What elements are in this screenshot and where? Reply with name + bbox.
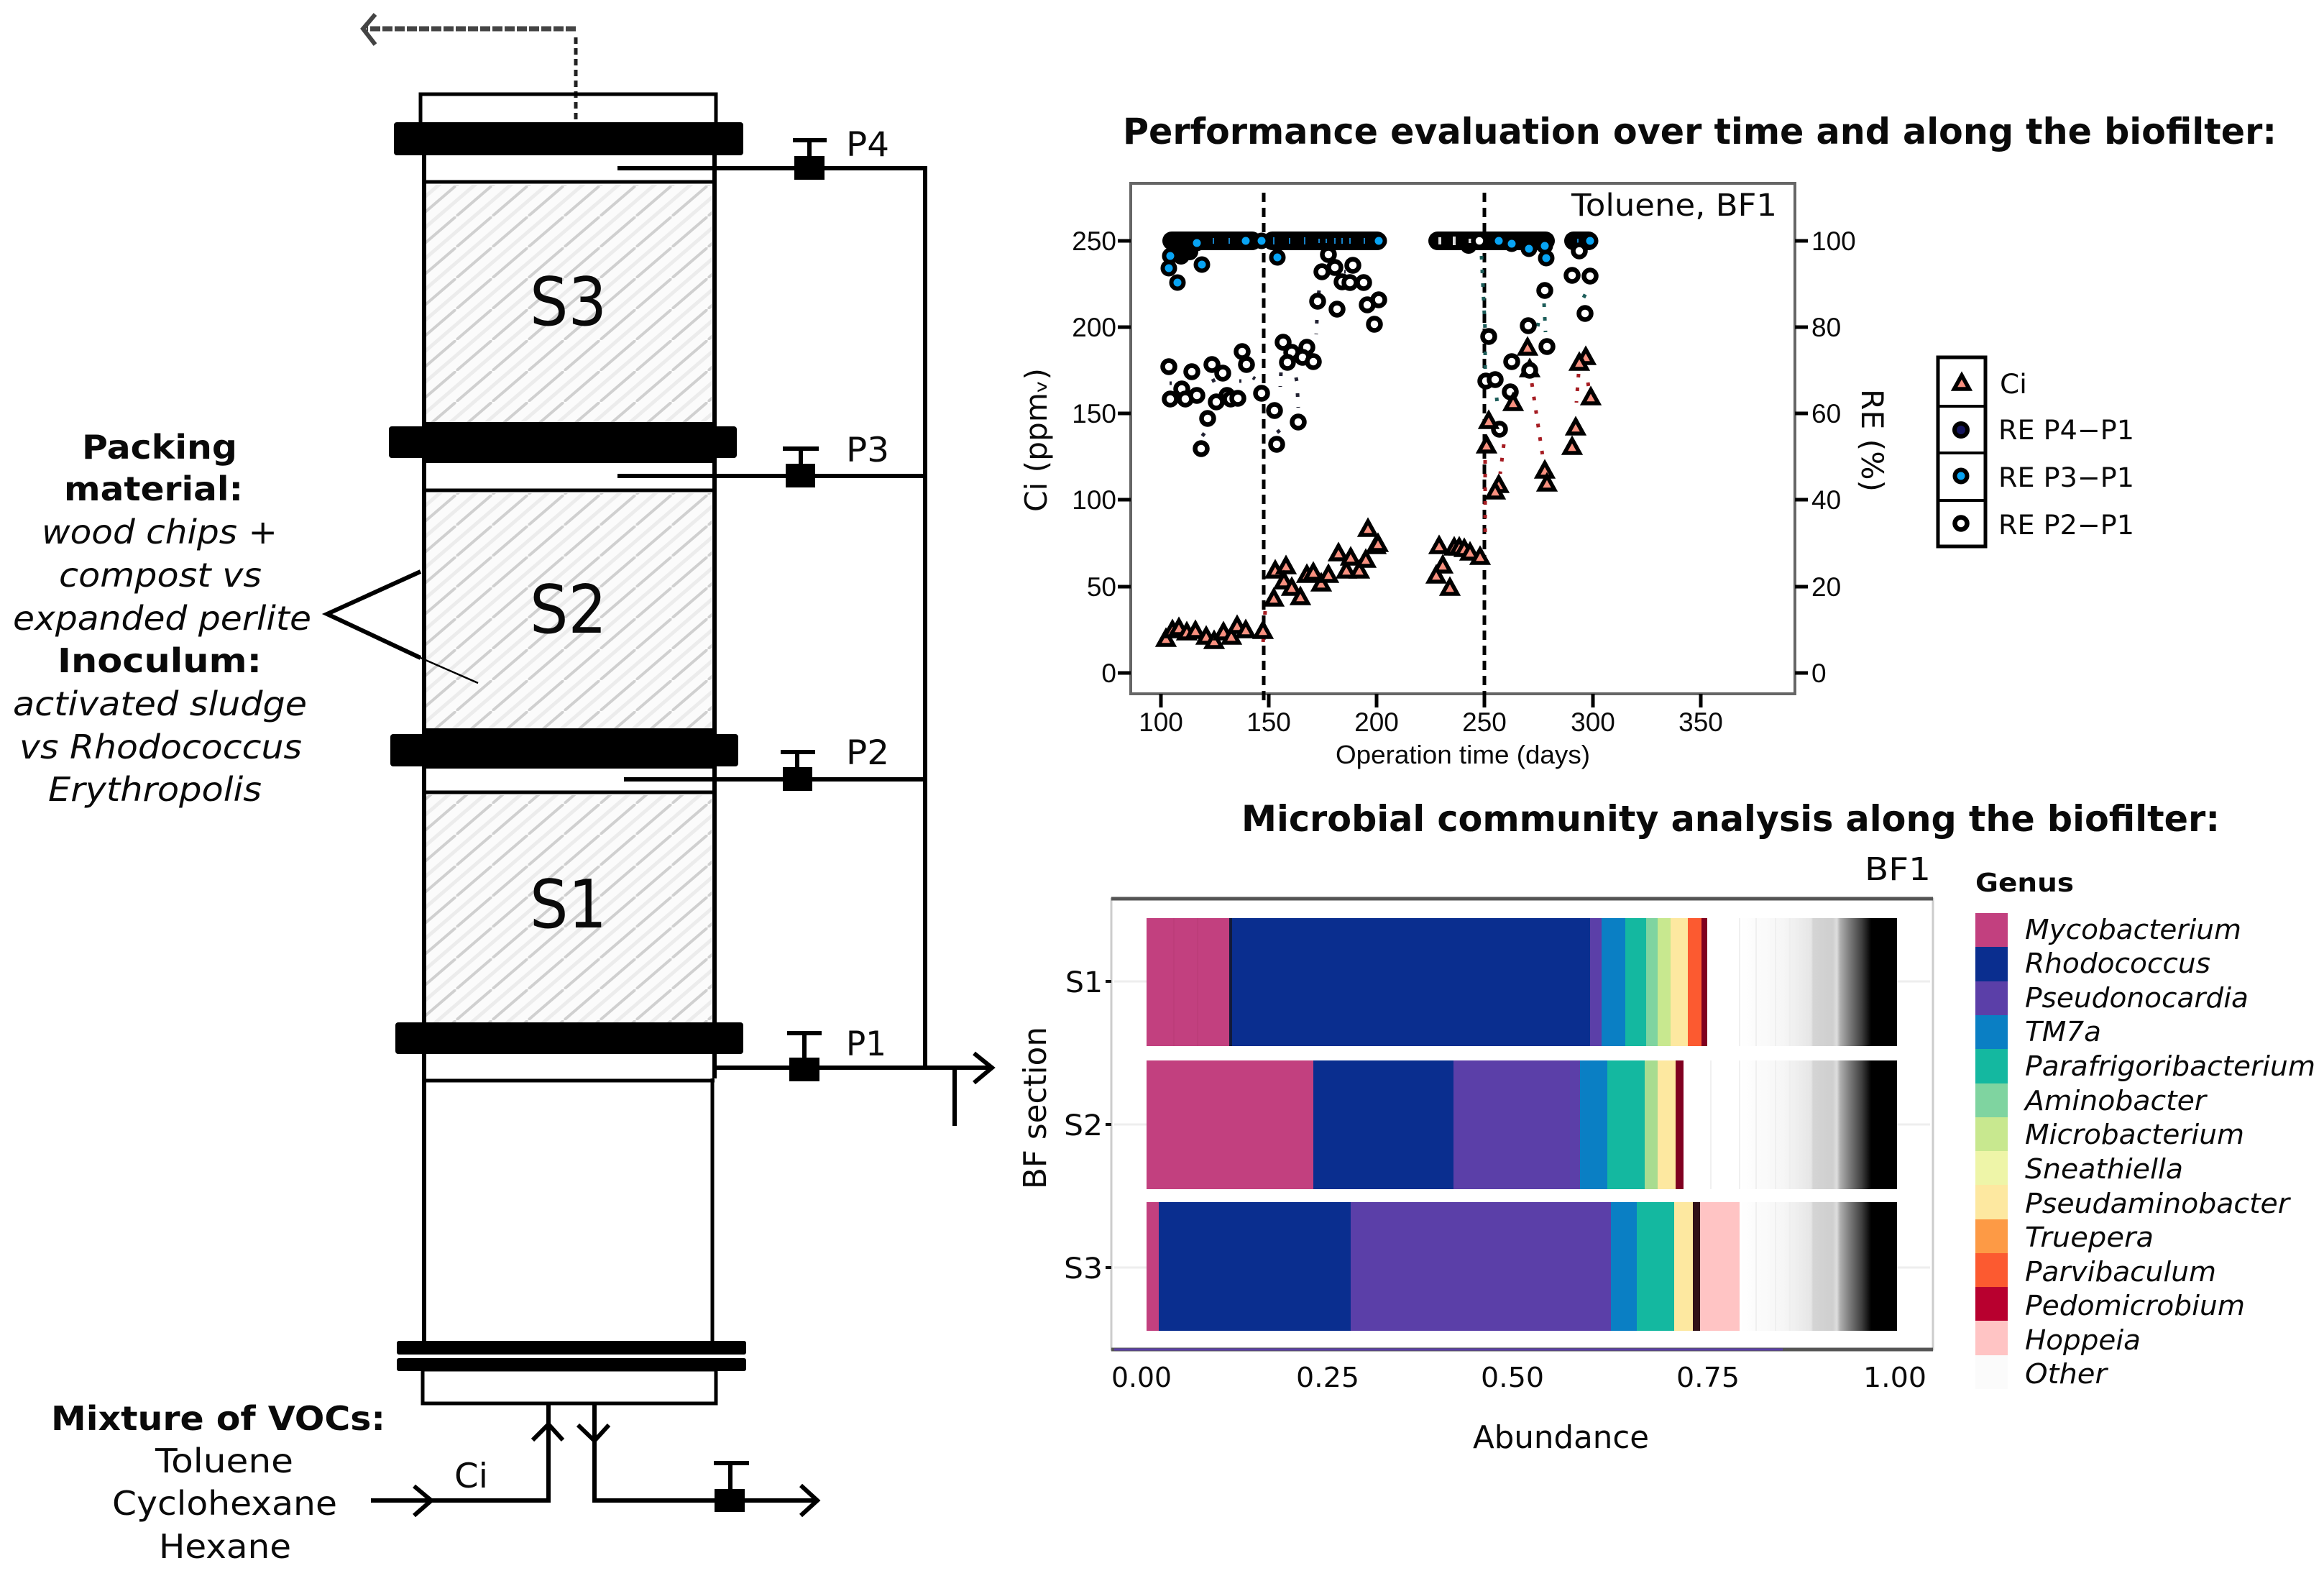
right axis labels: 40	[1811, 485, 1841, 515]
legend: genus: Aminobacter	[2023, 1085, 2208, 1117]
legend: genus: Parvibaculum	[2025, 1256, 2216, 1288]
valve P2	[781, 752, 815, 791]
dotted connecting lines	[1170, 256, 1589, 643]
bottom axis labels: 100	[1139, 707, 1183, 737]
x labels: 0.25	[1296, 1362, 1359, 1393]
open circles overlapping triangles	[1524, 364, 1535, 377]
VOC mixture description	[51, 1399, 385, 1566]
series: RE P3-P1 blue points	[1163, 234, 1596, 289]
right axis labels: 60	[1811, 399, 1841, 429]
legend: genus: Pedomicrobium	[2025, 1290, 2245, 1321]
right axis labels	[1811, 226, 1856, 688]
bottom axis labels: 250	[1462, 707, 1507, 737]
legend: genus: Other	[2025, 1358, 2108, 1390]
series: removal efficiency black band	[1172, 234, 1589, 265]
packing and inoculum description: activated sludge	[13, 684, 307, 723]
plot frame	[1111, 899, 1933, 1349]
legend: performance series: RE P4−P1	[1998, 415, 2134, 446]
x labels	[1111, 1362, 1926, 1393]
y axis title: BF section	[1017, 1027, 1054, 1189]
bottom axis labels: 350	[1678, 707, 1723, 737]
legend: performance series: Ci	[2000, 369, 2027, 400]
valve P3	[783, 449, 819, 487]
chart tag: BF1	[1865, 851, 1931, 888]
left axis labels: 50	[1087, 572, 1116, 602]
valve P4	[793, 140, 827, 180]
legend: genus: Rhodococcus	[2025, 948, 2210, 979]
callout pointer lines	[327, 572, 478, 683]
heading: microbial community: Microbial community analysis along the biofilter:	[1241, 798, 2220, 840]
bottom axis labels: 300	[1571, 707, 1615, 737]
panel: biofilter column schematic	[13, 14, 992, 1566]
x labels: 0.50	[1481, 1362, 1544, 1393]
inlet valve	[714, 1463, 749, 1512]
left axis labels: 100	[1072, 485, 1116, 515]
sampling pipes and main collector	[617, 166, 992, 1126]
bottom axis labels: 200	[1354, 707, 1399, 737]
legend: genus: Parafrigoribacterium	[2025, 1050, 2315, 1082]
hatched packing sections	[426, 185, 712, 1022]
packing and inoculum description: material:	[64, 469, 243, 508]
packing and inoculum description: vs Rhodococcus	[19, 728, 302, 766]
left axis labels	[1072, 226, 1116, 688]
series: RE P2-P1 open circles	[1163, 234, 1596, 454]
x axis title: Operation time (days)	[1336, 740, 1590, 769]
packing and inoculum description: expanded perlite	[13, 599, 311, 638]
left axis labels: 150	[1072, 399, 1116, 429]
legend: genus: Microbacterium	[2025, 1119, 2244, 1150]
plot frame	[1131, 183, 1795, 694]
panel: microbial abundance stacked bars	[1017, 851, 2315, 1456]
VOC mixture description: Hexane	[159, 1527, 291, 1566]
y labels: S2	[1064, 1109, 1103, 1142]
right axis labels: 100	[1811, 226, 1856, 256]
bar S1	[1147, 918, 1897, 1046]
legend: genus: Hoppeia	[2025, 1324, 2141, 1356]
left axis labels: 200	[1072, 313, 1116, 342]
flanges	[389, 122, 746, 1371]
left axis labels: 0	[1101, 659, 1116, 688]
legend: genus: Mycobacterium	[2025, 914, 2241, 945]
right axis labels: 80	[1811, 313, 1841, 342]
bottom axis labels: 150	[1246, 707, 1291, 737]
y tick marks	[1106, 981, 1111, 1268]
heading: performance evaluation: Performance evaluation over time and along the biofilter:	[1123, 111, 2277, 152]
left axis title: Ci (ppmᵥ)	[1019, 368, 1054, 512]
right axis title: RE (%)	[1855, 389, 1890, 492]
chart tag: Toluene, BF1	[1571, 188, 1777, 224]
port label P1: P1	[846, 1025, 886, 1064]
section label S3: S3	[530, 263, 607, 341]
y labels: S1	[1065, 966, 1103, 999]
legend: genus: Genus	[1975, 869, 2074, 898]
packing and inoculum description: Erythropolis	[48, 770, 262, 809]
legend: performance series: RE P3−P1	[1998, 462, 2134, 493]
y labels	[1064, 966, 1103, 1286]
valve P1	[787, 1033, 822, 1081]
legend: genus: Sneathiella	[2025, 1153, 2183, 1185]
x labels: 0.00	[1111, 1362, 1172, 1393]
axis ticks	[1118, 241, 1808, 707]
column outline	[421, 94, 716, 1403]
inlet and outlet piping with arrows	[371, 1403, 817, 1516]
packing and inoculum description: compost vs	[59, 556, 262, 595]
right axis labels: 0	[1811, 659, 1827, 688]
bar S2	[1147, 1060, 1897, 1189]
packing and inoculum description	[13, 428, 311, 809]
VOC mixture description: Cyclohexane	[112, 1484, 337, 1523]
port label P4: P4	[846, 125, 889, 165]
legend: performance series: RE P2−P1	[1998, 510, 2134, 541]
panel: performance scatter chart	[1019, 183, 2134, 769]
exhaust dashed outlet arrow	[363, 14, 576, 119]
port label P3: P3	[846, 431, 889, 470]
x labels: 0.75	[1676, 1362, 1740, 1393]
legend: genus: Pseudonocardia	[2025, 982, 2249, 1014]
bar S3	[1147, 1202, 1897, 1331]
left axis labels: 250	[1072, 226, 1116, 256]
port label P2: P2	[846, 733, 889, 773]
right axis labels: 20	[1811, 572, 1841, 602]
section label S2: S2	[530, 571, 607, 649]
legend: genus	[1975, 869, 2315, 1390]
inlet label Ci: Ci	[454, 1457, 488, 1496]
section label S1: S1	[530, 866, 607, 943]
y labels: S3	[1064, 1252, 1103, 1286]
x axis title: Abundance	[1473, 1419, 1649, 1456]
VOC mixture description: Mixture of VOCs:	[51, 1399, 385, 1438]
legend: genus: TM7a	[2025, 1016, 2101, 1048]
packing and inoculum description: Inoculum:	[58, 641, 262, 680]
packing and inoculum description: wood chips +	[42, 513, 277, 551]
bottom axis labels	[1139, 707, 1723, 737]
VOC mixture description: Toluene	[155, 1442, 293, 1480]
packing and inoculum description: Packing	[82, 428, 237, 467]
legend: performance series	[1938, 357, 2134, 546]
legend: genus: Truepera	[2025, 1222, 2154, 1253]
x labels: 1.00	[1863, 1362, 1926, 1393]
phase change dashed lines	[1264, 193, 1484, 701]
series: Ci triangles	[1159, 340, 1599, 647]
legend: genus: Pseudaminobacter	[2025, 1188, 2291, 1219]
